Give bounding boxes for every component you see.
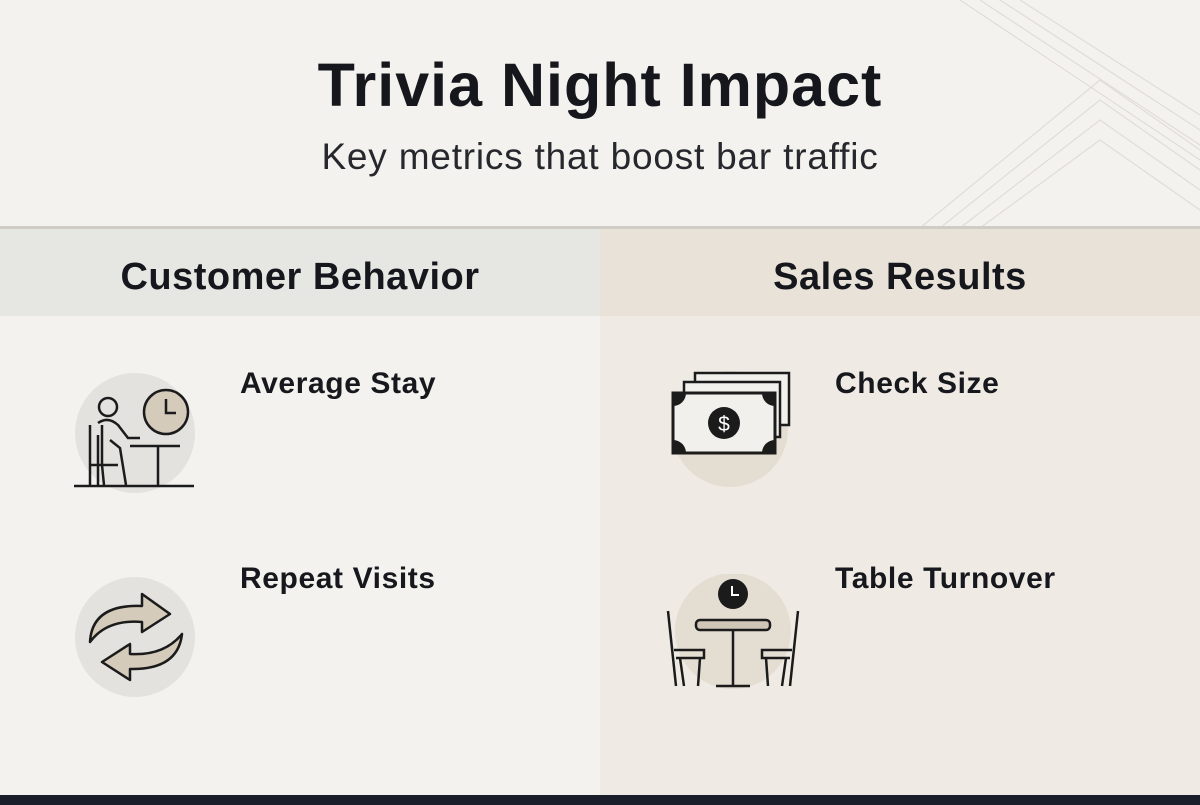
heading: sales results: Sales Results [773,256,1027,298]
icon: repeat arrows [75,577,195,697]
icon: money bills [672,371,790,487]
icon: person at table with clock [74,373,195,493]
icon: money bills: $ [718,413,730,436]
label: check size: Check Size [835,367,999,400]
icon: table with chairs and clock [666,574,800,689]
title: Trivia Night Impact [318,51,882,119]
heading: sales results [600,229,1200,316]
footer bar [0,795,1200,805]
heading: customer behavior [0,229,600,316]
label: average stay: Average Stay [240,367,436,400]
label: repeat visits: Repeat Visits [240,562,436,595]
decorative lines top right [922,0,1200,226]
label: table turnover: Table Turnover [835,562,1056,595]
heading: customer behavior: Customer Behavior [120,256,480,298]
panel: customer behavior [0,229,600,795]
subtitle: Key metrics that boost bar traffic [321,136,879,177]
panel: sales results [600,229,1200,795]
